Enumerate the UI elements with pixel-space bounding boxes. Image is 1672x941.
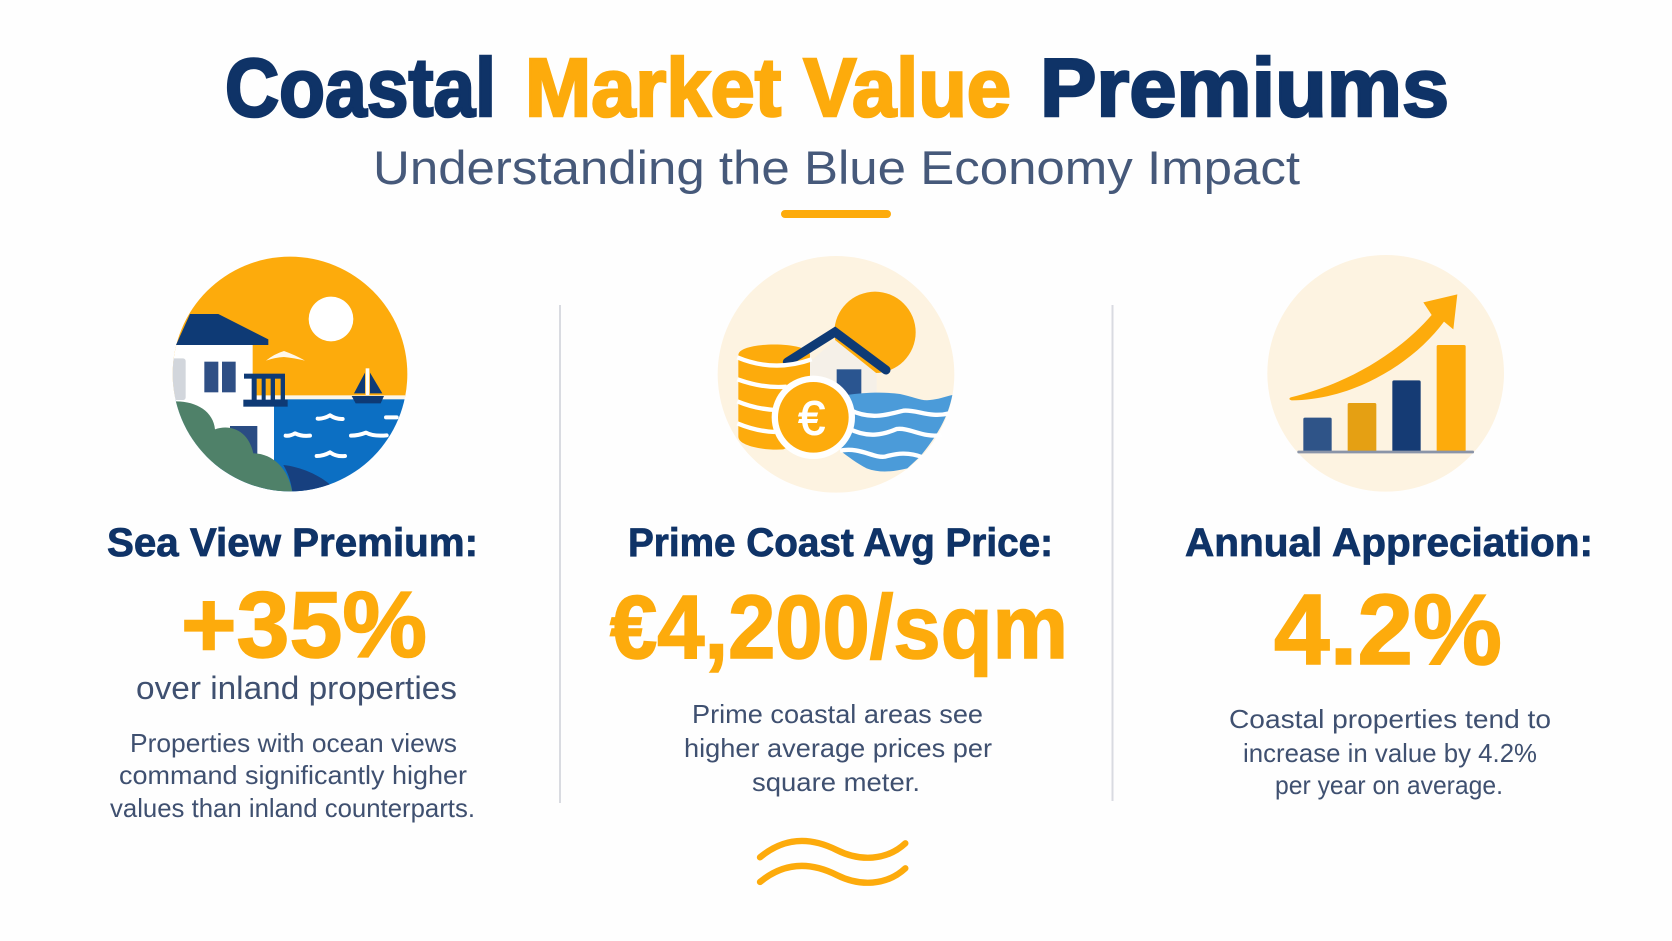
subtitle: Understanding the Blue Economy Impact [373, 141, 1300, 194]
icon: rising bar chart with arrow [1267, 255, 1504, 492]
icon: house, coins and waves [718, 256, 954, 493]
heading: prime coast avg price: Prime Coast Avg Price: [628, 521, 1053, 565]
title: Premiums [1040, 41, 1449, 134]
description: square meter. [752, 767, 920, 797]
description: Prime coastal areas see [692, 699, 983, 729]
heading: sea view premium: Sea View Premium: [107, 521, 478, 565]
panel: annual appreciation [1185, 255, 1593, 800]
icon: decorative waves [760, 841, 905, 883]
value: +35%: +35% [181, 572, 427, 677]
description: higher average prices per [684, 733, 992, 763]
description: Coastal properties tend to [1229, 704, 1551, 734]
title: Coastal [225, 41, 496, 134]
icon: house, coins and waves: € [798, 391, 825, 445]
infographic [108, 54, 1590, 886]
value: 4.2%: 4.2% [1274, 574, 1502, 686]
heading: annual appreciation: Annual Appreciation: [1185, 521, 1593, 565]
description: per year on average. [1275, 770, 1503, 800]
sub-label: over inland properties [136, 670, 457, 706]
icon: coastal house at sunset [170, 253, 410, 498]
description: values than inland counterparts. [110, 793, 475, 823]
description: Properties with ocean views [130, 728, 457, 758]
value: €4,200/sqm: €4,200/sqm [610, 578, 1068, 678]
description: increase in value by 4.2% [1243, 738, 1537, 768]
title: Market Value [525, 41, 1011, 134]
panel: prime coast average price [610, 256, 1068, 797]
description [684, 699, 992, 797]
title underline [781, 210, 891, 218]
title [225, 41, 1449, 134]
panel: sea view premium [107, 253, 478, 823]
description [1229, 704, 1551, 800]
description [110, 728, 475, 823]
description: command significantly higher [119, 760, 467, 790]
